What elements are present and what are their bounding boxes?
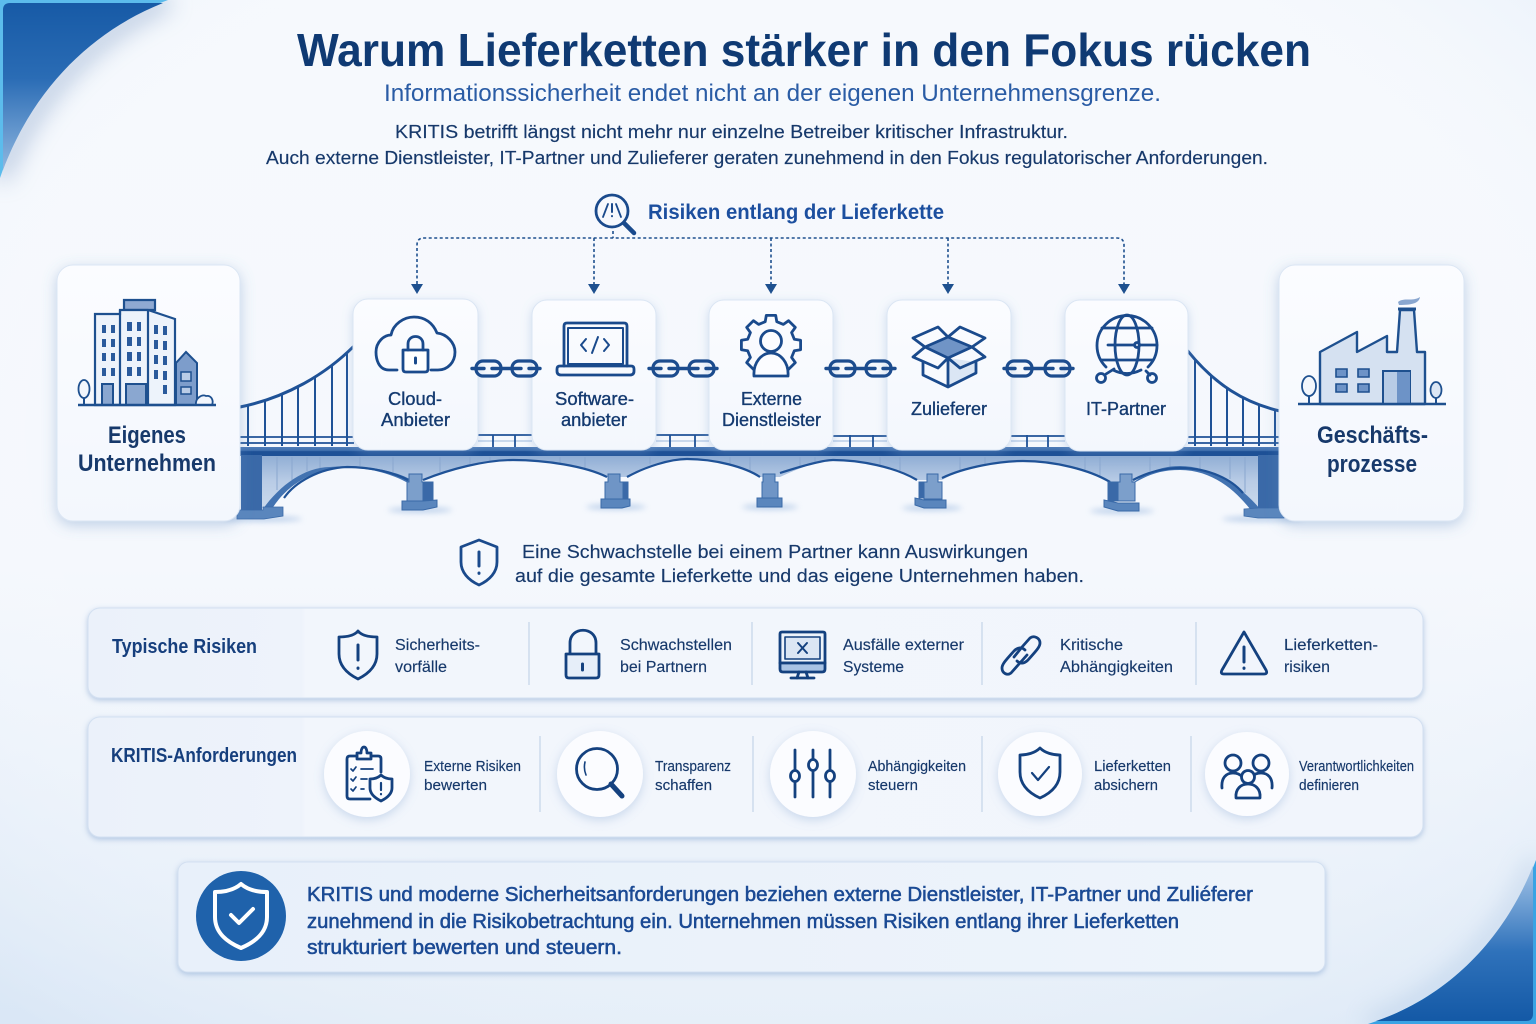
label: Dienstleister bbox=[722, 410, 821, 430]
label: anbieter bbox=[561, 410, 627, 430]
label: Unternehmen bbox=[78, 450, 216, 477]
item: Kritische Abhängigkeiten: Abhängigkeiten bbox=[1060, 659, 1173, 676]
item: Ausfälle externer Systeme: Ausfälle externer bbox=[843, 637, 965, 654]
item: Schwachstellen bei Partnern: bei Partnern bbox=[620, 659, 707, 676]
item: Externe Risiken bewerten: bewerten bbox=[424, 778, 487, 794]
panel: conclusion bbox=[178, 862, 1325, 972]
item: Kritische Abhängigkeiten: Kritische bbox=[1060, 637, 1123, 654]
item: Sicherheitsvorfälle: Sicherheits- bbox=[395, 637, 480, 654]
title: Warum Lieferketten stärker in den Fokus rücken bbox=[297, 24, 1311, 76]
intro text bbox=[266, 122, 1268, 168]
label: Software- bbox=[555, 389, 634, 409]
item: Sicherheitsvorfälle: vorfälle bbox=[395, 659, 447, 676]
item: Lieferkettenrisiken: risiken bbox=[1284, 659, 1330, 676]
item: Transparenz schaffen: Transparenz bbox=[655, 759, 731, 775]
item: Ausfälle externer Systeme: Systeme bbox=[843, 659, 904, 676]
card: Externe Dienstleister bbox=[709, 300, 833, 450]
item: Externe Risiken bewerten: Externe Risiken bbox=[424, 759, 521, 775]
item: Lieferkettenrisiken bbox=[1221, 632, 1378, 676]
callout: weak point bbox=[461, 540, 1084, 586]
dotted connector arrows bbox=[417, 231, 1124, 284]
intro text: KRITIS betrifft längst nicht mehr nur einzelne Betreiber kritischer Infrastruktur. bbox=[395, 122, 1068, 142]
subtitle: Informationssicherheit endet nicht an der eigenen Unternehmensgrenze. bbox=[384, 80, 1161, 107]
item: Transparenz schaffen bbox=[557, 731, 731, 817]
arch ribs bbox=[263, 466, 1260, 509]
card: Cloud-Anbieter bbox=[353, 299, 478, 450]
arches bbox=[262, 455, 1258, 508]
label: Externe bbox=[741, 389, 802, 409]
item: Kritische Abhängigkeiten bbox=[1002, 637, 1173, 676]
chain links bbox=[472, 361, 1073, 376]
card: Zulieferer bbox=[887, 300, 1011, 450]
label: IT-Partner bbox=[1086, 399, 1166, 419]
label bbox=[78, 422, 216, 477]
item: Abhängigkeiten steuern bbox=[770, 731, 966, 817]
label: Zulieferer bbox=[911, 399, 987, 419]
item: Lieferketten absichern bbox=[998, 732, 1171, 816]
abutments bbox=[241, 455, 262, 510]
conclusion text: strukturiert bewerten und steuern. bbox=[307, 937, 622, 959]
piers bbox=[402, 474, 1139, 511]
item: Lieferketten absichern: absichern bbox=[1094, 778, 1158, 794]
corner accent: bottom right bbox=[1368, 860, 1536, 1024]
item: Verantwortlichkeiten definieren: Verantwortlichkeiten bbox=[1299, 759, 1414, 775]
label bbox=[1317, 422, 1428, 478]
icon: factory bbox=[1298, 297, 1446, 404]
bridge bbox=[222, 346, 1302, 522]
spandrel panel lines bbox=[277, 457, 1245, 493]
panel: typische Risiken bbox=[88, 608, 1423, 698]
panel: KRITIS-Anforderungen bbox=[88, 717, 1423, 837]
conclusion text: KRITIS und moderne Sicherheitsanforderungen beziehen externe Dienstleister, IT-Partner und Zuliéferer bbox=[307, 884, 1253, 906]
item: Sicherheitsvorfälle bbox=[339, 631, 480, 679]
item: Lieferkettenrisiken: Lieferketten- bbox=[1284, 637, 1378, 654]
icon: shield badge bbox=[196, 871, 286, 961]
item: Schwachstellen bei Partnern bbox=[566, 630, 732, 678]
item: Schwachstellen bei Partnern: Schwachstellen bbox=[620, 637, 732, 654]
heading: Typische Risiken bbox=[112, 636, 257, 658]
card: Eigenes Unternehmen bbox=[57, 265, 240, 521]
item: Lieferketten absichern: Lieferketten bbox=[1094, 759, 1171, 775]
item: Abhängigkeiten steuern: steuern bbox=[868, 778, 918, 794]
item: Verantwortlichkeiten definieren: definieren bbox=[1299, 778, 1359, 794]
label: Geschäfts- bbox=[1317, 422, 1428, 449]
card: Softwareanbieter bbox=[532, 300, 656, 450]
item: Ausfälle externer Systeme bbox=[780, 632, 965, 678]
label: Anbieter bbox=[381, 410, 450, 430]
suspension cables bbox=[240, 346, 1280, 447]
icon: gear with person bbox=[741, 315, 801, 376]
corner accent: top left bbox=[0, 0, 168, 178]
item: Externe Risiken bewerten bbox=[324, 731, 521, 817]
card: IT-Partner bbox=[1065, 300, 1188, 451]
intro text: Auch externe Dienstleister, IT-Partner und Zulieferer geraten zunehmend in den Fokus regulatorischer Anforderungen. bbox=[266, 148, 1268, 168]
heading: risks along the supply chain: Risiken entlang der Lieferkette bbox=[648, 201, 944, 224]
item: Verantwortlichkeiten definieren bbox=[1205, 732, 1414, 816]
label bbox=[555, 389, 634, 430]
icon: office building bbox=[78, 300, 216, 405]
heading: KRITIS-Anforderungen bbox=[111, 745, 297, 767]
icon: risk magnifier bbox=[596, 195, 634, 233]
bridge shadow bbox=[222, 504, 1302, 522]
item: Transparenz schaffen: schaffen bbox=[655, 778, 712, 794]
icon: open box bbox=[913, 327, 985, 387]
label bbox=[381, 389, 450, 430]
card: Geschäftsprozesse bbox=[1279, 265, 1464, 521]
icon: shield alert bbox=[461, 540, 497, 585]
label: Eigenes bbox=[108, 422, 186, 449]
icon: laptop with code bbox=[557, 323, 634, 375]
conclusion text: zunehmend in die Risikobetrachtung ein. Unternehmen müssen Risiken entlang ihrer Lieferketten bbox=[307, 911, 1179, 933]
callout: weak point: auf die gesamte Lieferkette und das eigene Unternehmen haben. bbox=[515, 565, 1084, 586]
callout: weak point: Eine Schwachstelle bei einem Partner kann Auswirkungen bbox=[522, 541, 1028, 562]
label: Cloud- bbox=[388, 389, 442, 409]
deck bbox=[240, 447, 1280, 456]
conclusion text bbox=[307, 884, 1253, 959]
icon: cloud with lock bbox=[376, 317, 455, 372]
icon: globe network bbox=[1096, 315, 1157, 382]
label: prozesse bbox=[1327, 451, 1417, 478]
label bbox=[722, 389, 821, 430]
item: Abhängigkeiten steuern: Abhängigkeiten bbox=[868, 759, 966, 775]
